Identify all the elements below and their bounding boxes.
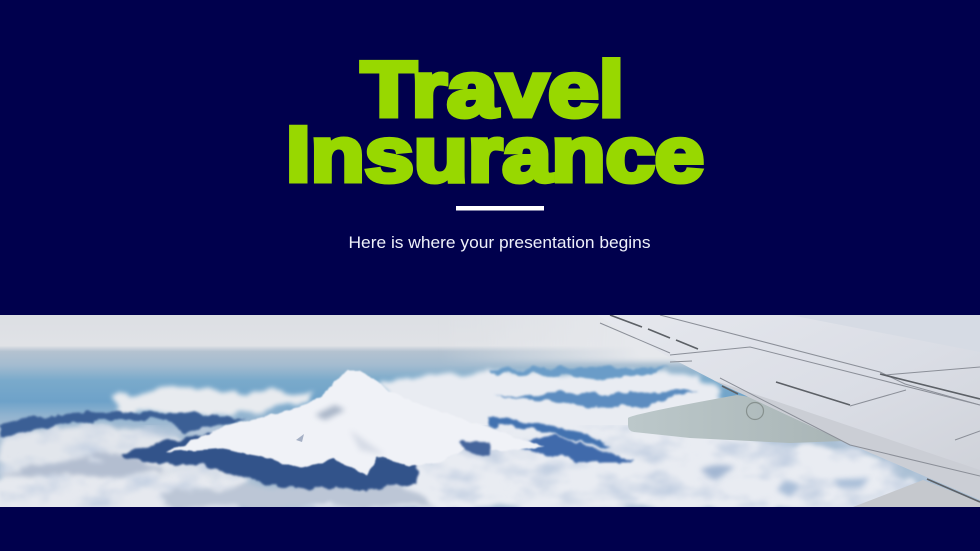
wing panel lines xyxy=(600,315,980,476)
misty grey base xyxy=(160,484,440,507)
snow cap xyxy=(167,371,545,475)
thin cloud shadows xyxy=(0,455,170,478)
sky xyxy=(0,315,980,507)
photo: mountain seen from airplane window xyxy=(0,315,980,507)
dark forest base xyxy=(120,425,417,488)
blue gaps between clouds xyxy=(488,367,870,497)
cloud mottling xyxy=(0,425,930,507)
divider line xyxy=(456,206,544,210)
flap fairing xyxy=(628,395,843,443)
title: Travel xyxy=(361,45,624,133)
snow shading xyxy=(315,405,345,420)
side rocks xyxy=(460,442,490,456)
title xyxy=(286,45,704,198)
title: Insurance xyxy=(286,110,704,198)
mountain xyxy=(120,371,545,507)
main wing xyxy=(676,317,980,500)
wing lower section xyxy=(853,480,980,507)
dark ridge on the left xyxy=(0,412,245,438)
subtitle: Here is where your presentation begins xyxy=(348,233,650,252)
clouds xyxy=(0,371,960,515)
